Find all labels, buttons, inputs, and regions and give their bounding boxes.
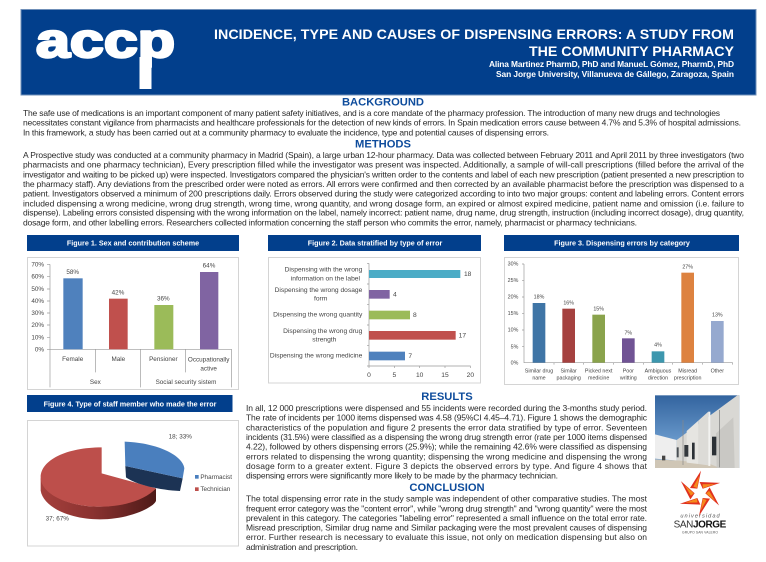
bar chart: sex and contribution scheme: active bbox=[200, 366, 217, 373]
heading: background: BACKGROUND bbox=[342, 96, 424, 108]
bar chart: dispensing errors by category: prescription bbox=[674, 376, 701, 382]
bar chart: dispensing errors by category: 27% bbox=[682, 264, 693, 270]
bar chart: sex and contribution scheme: 70% bbox=[31, 262, 44, 269]
panel: figure 3 bbox=[504, 235, 739, 384]
bar chart: errors by type: 15 bbox=[441, 372, 449, 379]
methods text: dosage form, and other labelling errors. Researchers collected information concerning the staff person who commits the error, namely, pharmacist or pharmacy technicians. bbox=[23, 217, 637, 227]
bar chart: errors by type: 17 bbox=[459, 332, 466, 339]
methods text: A Prospective study was conducted at a community pharmacy in Madrid (Spain), a large urban 12-hour pharmacy. Data was collected between February 2011 and April 2011 by three investigators (two bbox=[23, 150, 744, 160]
logo: universidad San Jorge: SANJORGE bbox=[674, 519, 727, 530]
logo: accp: accp bbox=[36, 15, 175, 68]
bar chart: dispensing errors by category: medicine bbox=[588, 376, 609, 382]
bar chart: sex and contribution scheme: 58% bbox=[66, 269, 79, 276]
bar chart: dispensing errors by category: Similar bbox=[561, 369, 577, 375]
results text: dispensing errors were significantly more likely to be made by the pharmacy technician. bbox=[246, 471, 558, 481]
bar chart: dispensing errors by category: Misread bbox=[678, 369, 697, 375]
bar chart: errors by type: information on the label bbox=[291, 275, 361, 282]
bar chart: dispensing errors by category: packaging bbox=[557, 376, 581, 382]
bar chart: dispensing errors by category: 15% bbox=[508, 311, 519, 317]
bar chart: sex and contribution scheme: Social security sistem bbox=[156, 379, 216, 386]
results text bbox=[246, 403, 648, 481]
bar chart: errors by type: 18 bbox=[464, 271, 472, 278]
photo: university building bbox=[655, 395, 739, 468]
header banner bbox=[21, 10, 756, 95]
results text: The rate of incidents per 1000 items dispensed was 4.58 (95%CI 4.45–4.71). Figure 1 shows the demographic bbox=[246, 413, 648, 423]
authors and affiliation bbox=[489, 59, 734, 79]
bar chart: dispensing errors by category: 16% bbox=[563, 301, 574, 307]
bar chart: sex and contribution scheme: 10% bbox=[31, 334, 44, 341]
bar chart: dispensing errors by category: Other bbox=[711, 369, 724, 375]
bar chart: sex and contribution scheme: Male bbox=[111, 356, 126, 363]
title: INCIDENCE, TYPE AND CAUSES OF DISPENSING ERRORS: A STUDY FROM bbox=[214, 27, 734, 43]
panel: figure 2 bbox=[268, 235, 481, 383]
bar chart: errors by type: 20 bbox=[467, 372, 474, 379]
bar chart: errors by type: strength bbox=[312, 337, 337, 344]
bar chart: errors by type: 4 bbox=[393, 291, 397, 298]
bar chart: dispensing errors by category: writting bbox=[620, 376, 637, 382]
conclusion text bbox=[246, 494, 648, 552]
bar chart: dispensing errors by category: 13% bbox=[712, 313, 723, 319]
bar chart: errors by type: Dispensing the wrong quantity bbox=[273, 312, 363, 319]
logo: universidad San Jorge bbox=[674, 471, 727, 534]
methods text: pharmacists and one pharmacy technician), Every prescription filled while the investigator was present was inspected. Additionally, a sample of will-call prescriptions (filled before the arrival of the bbox=[23, 160, 744, 170]
bar chart: dispensing errors by category: direction bbox=[648, 376, 668, 382]
bar chart: errors by type: Dispensing the wrong drug bbox=[283, 328, 363, 335]
bar chart: sex and contribution scheme: 42% bbox=[112, 289, 125, 296]
bar chart: dispensing errors by category: Similar drug bbox=[525, 369, 553, 375]
figure 3 heading: Figure 3. Dispensing errors by category bbox=[554, 238, 690, 248]
methods text bbox=[23, 150, 744, 227]
figure 4 heading bbox=[27, 395, 232, 412]
figure 1 heading: Figure 1. Sex and contribution scheme bbox=[67, 238, 199, 248]
figure 2 heading: Figure 2. Data stratified by type of error bbox=[308, 238, 442, 248]
bar chart: dispensing errors by category: name bbox=[532, 376, 546, 382]
background text bbox=[23, 108, 741, 137]
results text: dosage form to a greater extent. Figure 3 depicts the observed errors by type. And figure 4 shows that bbox=[246, 461, 648, 471]
bar chart: sex and contribution scheme bbox=[31, 262, 232, 387]
background text: necessitates constant vigilance from pharmacists and healthcare professionals for the detection of new kinds of errors. In Spain medication errors cause between 4.7% and 5.3% of hospital admissions. bbox=[23, 118, 741, 128]
bar chart: dispensing errors by category: 25% bbox=[508, 278, 519, 284]
bar chart: sex and contribution scheme: Sex bbox=[90, 379, 102, 386]
bar chart: sex and contribution scheme: 30% bbox=[31, 310, 44, 317]
bar chart: sex and contribution scheme: 40% bbox=[31, 298, 44, 305]
bar chart: dispensing errors by category: 4% bbox=[654, 343, 662, 349]
logo: accp bbox=[36, 15, 175, 89]
methods text: investigator and waiting to be picked up) were inspected. Investigators compared the physician's written order to the contents and label of each new prescription (patient presented a new prescription to bbox=[23, 169, 744, 179]
bar chart: sex and contribution scheme: Pensioner bbox=[149, 356, 178, 363]
background text: The safe use of medications is an important component of many patient safety initiatives, and is a core mandate of the pharmacy profession. The introduction of many new drugs and technologies bbox=[23, 108, 720, 118]
figure 1 heading bbox=[27, 235, 239, 251]
bar chart: sex and contribution scheme: 36% bbox=[157, 295, 170, 302]
pie chart: staff type: Pharmacist bbox=[200, 474, 232, 481]
bar chart: dispensing errors by category: 18% bbox=[534, 295, 545, 301]
results text: In all, 12 000 prescriptions were dispensed and 55 incidents were recorded during the 3-months study period. bbox=[246, 403, 647, 413]
heading: results: RESULTS bbox=[421, 391, 473, 403]
icon: star bbox=[675, 471, 725, 516]
results text: characteristics of the population and figure 2 presents the error data stratified by type of error. Seventeen bbox=[246, 422, 647, 432]
pie chart: staff type bbox=[41, 433, 232, 523]
pie chart: staff type: 18; 33% bbox=[169, 433, 192, 440]
bar chart: errors by type: 0 bbox=[367, 372, 371, 379]
bar chart: dispensing errors by category bbox=[508, 262, 733, 382]
bar chart: errors by type bbox=[270, 263, 474, 379]
panel: figure 4 bbox=[27, 395, 238, 546]
bar chart: errors by type: Dispensing the wrong dosage bbox=[275, 287, 363, 294]
bar chart: errors by type: 7 bbox=[408, 353, 412, 360]
methods text: patient. Investigators observed a minimum of 200 prescriptions daily. Errors observed during the study were categorized according to into two major groups: content and labeling errors. Content errors bbox=[23, 189, 744, 199]
bar chart: errors by type: 8 bbox=[413, 312, 417, 319]
bar chart: dispensing errors by category: 15% bbox=[593, 307, 604, 313]
pie chart: staff type: 37; 67% bbox=[46, 516, 69, 523]
figure 3 heading bbox=[504, 235, 739, 251]
figure 2 heading bbox=[268, 235, 481, 251]
heading: conclusion: CONCLUSION bbox=[409, 482, 485, 494]
bar chart: dispensing errors by category: 0% bbox=[511, 361, 519, 367]
conclusion text: The total dispensing error rate in the study sample was independent of other comparative studies. The most bbox=[246, 494, 648, 504]
background text: In this framework, a study has been carried out at a community pharmacy to evaluate the incidence, type and potential causes of dispensing errors. bbox=[23, 127, 549, 137]
methods text: dispense). Labeling errors consisted dispensing with the wrong information on the label, namely incorrect: patient name, drug name, drug strength, instruction (including incorrect dosage), drug quantity, bbox=[23, 208, 744, 218]
bar chart: dispensing errors by category: 5% bbox=[511, 344, 519, 350]
conclusion text: Misread prescription, Similar drug name and Similar packaging were the most prevalent causes of dispensing bbox=[246, 523, 647, 533]
bar chart: sex and contribution scheme: 50% bbox=[31, 286, 44, 293]
methods text: the pharmacy staff). Any deviations from the prescribed order were noted as errors. All errors were confirmed and then corrected by an available pharmacist before the prescription was dispensed to a bbox=[23, 179, 744, 189]
bar chart: sex and contribution scheme: 64% bbox=[203, 262, 216, 269]
bar chart: errors by type: Dispensing the wrong medicine bbox=[270, 353, 363, 360]
panel: figure 1 bbox=[27, 235, 239, 390]
bar chart: sex and contribution scheme: 0% bbox=[35, 346, 44, 353]
bar chart: dispensing errors by category: Poor bbox=[623, 369, 634, 375]
logo: universidad San Jorge: GRUPO SAN VALERO bbox=[682, 530, 718, 534]
bar chart: dispensing errors by category: 20% bbox=[508, 295, 519, 301]
bar chart: dispensing errors by category: 30% bbox=[508, 262, 519, 268]
bar chart: errors by type: 5 bbox=[392, 372, 396, 379]
bar chart: errors by type: 10 bbox=[416, 372, 424, 379]
figure 4 heading: Figure 4. Type of staff member who made the error bbox=[44, 400, 217, 408]
bar chart: errors by type: Dispensing with the wrong bbox=[285, 266, 363, 273]
conclusion text: frequent error category was the "content error", while "wrong drug strength" and "wrong quantity" were the most bbox=[246, 503, 648, 513]
bar chart: dispensing errors by category: Picked next bbox=[585, 369, 613, 375]
bar chart: dispensing errors by category: 7% bbox=[624, 331, 632, 337]
results text: errors related to dispensing the wrong quantity; dispensing the wrong medicine and dispensing the wrong bbox=[246, 451, 647, 461]
bar chart: sex and contribution scheme: 20% bbox=[31, 322, 44, 329]
title: THE COMMUNITY PHARMACY bbox=[529, 44, 735, 60]
bar chart: sex and contribution scheme: 60% bbox=[31, 274, 44, 281]
logo: universidad San Jorge: universidad bbox=[680, 514, 721, 520]
conclusion text: administration and prescription. bbox=[246, 542, 358, 552]
authors and affiliation: San Jorge University, Villanueva de Gállego, Zaragoza, Spain bbox=[496, 69, 734, 79]
heading: methods: METHODS bbox=[355, 138, 412, 150]
bar chart: sex and contribution scheme: Occupationally bbox=[188, 356, 230, 363]
authors and affiliation: Alina Martinez PharmD, PhD and ManueL Gómez, PharmD, PhD bbox=[489, 59, 734, 69]
pie chart: staff type: Technician bbox=[200, 486, 231, 493]
bar chart: errors by type: form bbox=[314, 296, 328, 303]
title bbox=[214, 27, 735, 60]
bar chart: sex and contribution scheme: Female bbox=[62, 356, 84, 363]
methods text: included dispensing a wrong medicine, wrong drug strength, wrong time, wrong quantity, and wrong dosage form, an expired or almost expired medicine, patient name and omission (i.e. failure to bbox=[23, 198, 744, 208]
conclusion text: error. Further research is necessary to evaluate this issue, not only on medication dispensing but also on bbox=[246, 532, 647, 542]
conclusion text: prevalent in this category. The categories "labeling error" represented a small influence on the total error rate. bbox=[246, 513, 647, 523]
results text: 4.22), followed by others dispensing errors (25.9%); while the remaining 42.6% were classified as dispensing bbox=[246, 442, 647, 452]
bar chart: dispensing errors by category: Ambiguous bbox=[645, 369, 672, 375]
results text: incidents (31.5%) were classified as a dispensing the wrong drug strength error (rate per 1000 items dispensed bbox=[246, 432, 647, 442]
bar chart: dispensing errors by category: 10% bbox=[508, 328, 519, 334]
